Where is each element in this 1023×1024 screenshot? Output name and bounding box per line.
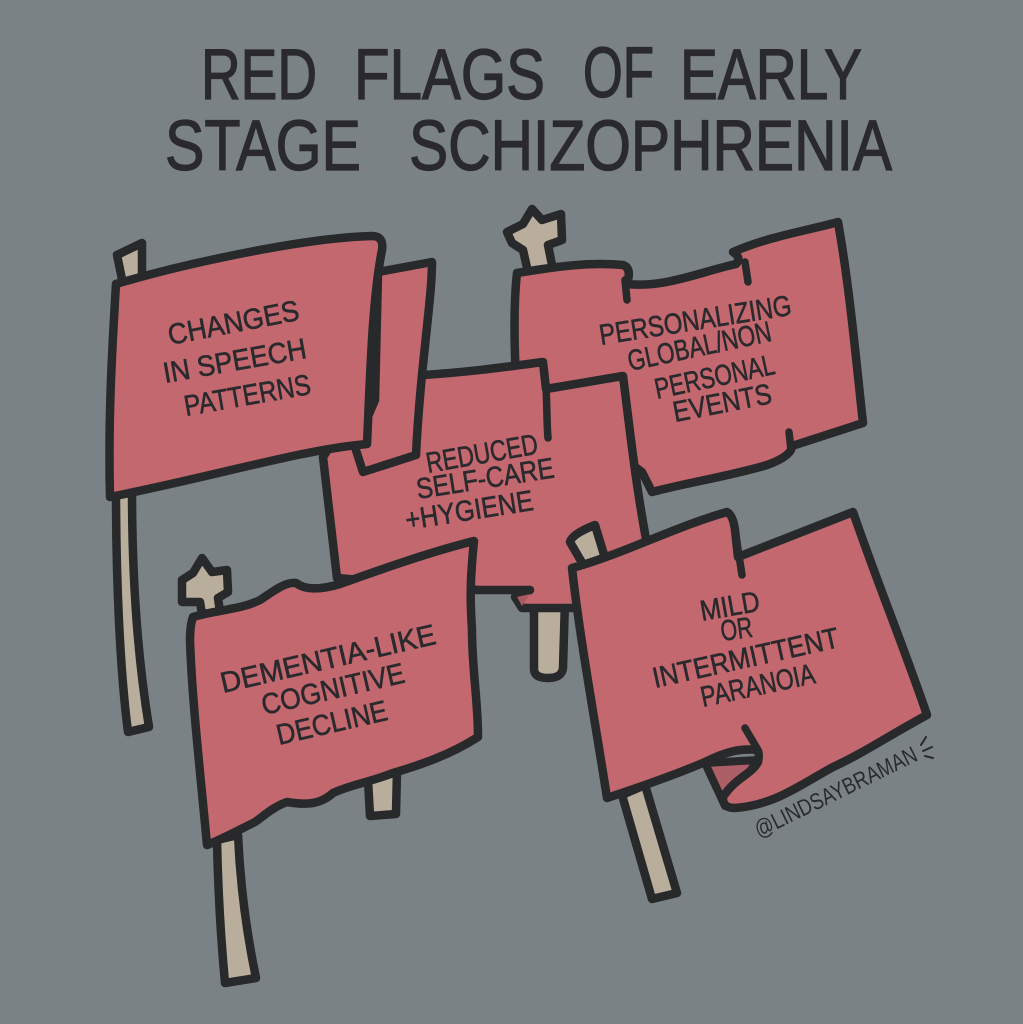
- label: IN SPEECH: [161, 333, 309, 390]
- label: OR: [719, 612, 755, 648]
- flag cloth: [515, 222, 863, 492]
- label: PARANOIA: [698, 658, 818, 714]
- title: STAGE: [165, 107, 361, 186]
- flag cloth: [323, 362, 650, 608]
- flag: changes in speech patterns: [109, 236, 432, 732]
- label: CHANGES: [165, 295, 302, 352]
- label: DECLINE: [273, 695, 391, 752]
- title: RED: [201, 36, 317, 115]
- pole top: star finial: [507, 209, 562, 272]
- pole stub: [534, 600, 565, 678]
- flag: dementia-like cognitive decline: [182, 541, 478, 983]
- title: FLAGS: [354, 36, 545, 115]
- icon: sparkle rays: [921, 737, 933, 758]
- flag cloth: [572, 512, 927, 808]
- pole: [570, 525, 677, 899]
- label: GLOBAL/NON: [625, 316, 774, 378]
- pole: [182, 558, 397, 983]
- label: REDUCED: [424, 429, 540, 480]
- cloth underside fold: [705, 760, 758, 806]
- label: SELF-CARE: [414, 453, 556, 506]
- label: [161, 295, 313, 423]
- fold notches: [735, 530, 758, 750]
- label: +HYGIENE: [403, 485, 536, 537]
- author handle: @LINDSAYBRAMAN: [750, 741, 921, 842]
- pole: [116, 243, 149, 732]
- back fold of cloth: [355, 262, 432, 472]
- title: [165, 34, 893, 186]
- label: PATTERNS: [182, 369, 313, 423]
- label: DEMENTIA-LIKE: [217, 619, 439, 700]
- fold notches: [625, 262, 791, 450]
- label: INTERMITTENT: [650, 622, 842, 695]
- label: MILD: [698, 586, 762, 628]
- label: [217, 619, 439, 752]
- flag: reduced self-care and hygiene: [323, 362, 650, 678]
- title: EARLY: [680, 36, 862, 115]
- fold notches: [543, 362, 548, 438]
- label: [403, 429, 556, 537]
- flag cloth: [190, 541, 478, 845]
- title: SCHIZOPHRENIA: [409, 107, 893, 186]
- label: PERSONAL: [652, 349, 778, 406]
- label: COGNITIVE: [258, 658, 408, 722]
- label: [650, 586, 842, 714]
- flag: personalizing global events: [507, 209, 863, 492]
- label: PERSONALIZING: [597, 290, 794, 352]
- label: EVENTS: [670, 378, 774, 429]
- title: OF: [583, 34, 654, 113]
- label: [597, 290, 794, 429]
- flag cloth: [109, 236, 382, 497]
- flag: mild or intermittent paranoia: [570, 512, 927, 899]
